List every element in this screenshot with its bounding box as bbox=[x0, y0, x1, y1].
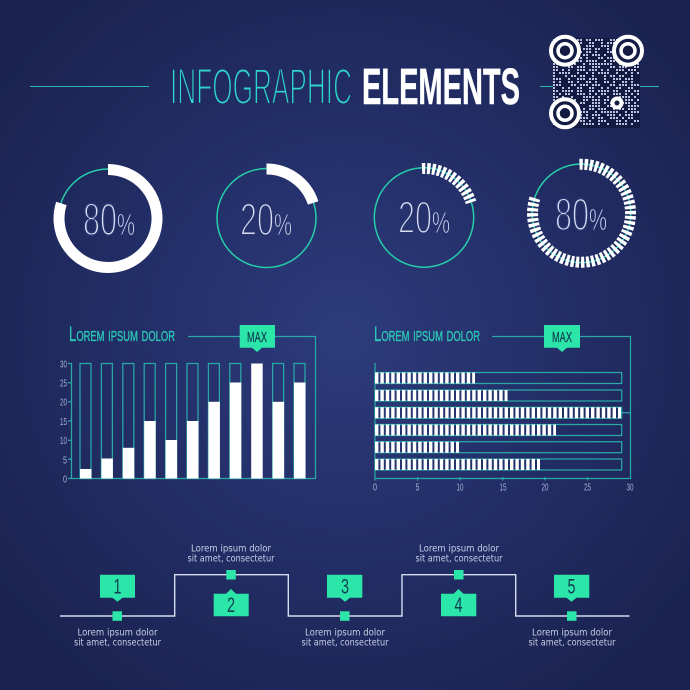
bar outlines bbox=[375, 372, 622, 470]
step 5 bbox=[528, 575, 616, 648]
step 4: Lorem ipsum dolor bbox=[419, 544, 499, 554]
step 2: sit amet, consectetur bbox=[188, 554, 275, 564]
step 3 bbox=[302, 575, 389, 648]
max tag bbox=[240, 325, 275, 352]
title: INFOGRAPHIC bbox=[170, 58, 352, 115]
y axis labels: 0 bbox=[63, 474, 67, 486]
x axis labels bbox=[373, 482, 634, 494]
donut: 80% solid bbox=[58, 169, 158, 268]
panel: column chart bbox=[60, 323, 316, 486]
step 2: Lorem ipsum dolor bbox=[191, 544, 271, 554]
step 3: Lorem ipsum dolor bbox=[305, 628, 385, 638]
x axis labels: 15 bbox=[500, 482, 507, 494]
heading: bar chart: Lorem ipsum dolor bbox=[374, 323, 480, 346]
donut: 80% segmented: 80 bbox=[555, 189, 589, 240]
max tag: MAX bbox=[247, 329, 267, 346]
donut: 20% segmented: 20 bbox=[398, 192, 432, 243]
x axis labels: 10 bbox=[456, 482, 464, 494]
column outlines bbox=[80, 364, 305, 478]
heading: column chart: Lorem ipsum dolor bbox=[69, 323, 175, 346]
donut: 80% solid: % bbox=[117, 207, 135, 242]
donut: 80% segmented bbox=[532, 164, 631, 263]
title bbox=[30, 58, 659, 115]
panel: horizontal bar chart bbox=[373, 323, 634, 494]
step 3: 3 bbox=[341, 576, 349, 598]
x axis labels: 25 bbox=[584, 482, 591, 494]
step 2: 2 bbox=[227, 594, 235, 617]
chart frame bbox=[375, 336, 630, 480]
donut: 20% segmented bbox=[374, 168, 474, 267]
step 4: sit amet, consectetur bbox=[416, 554, 503, 564]
donut: 80% segmented: % bbox=[589, 202, 607, 237]
x axis labels: 0 bbox=[373, 482, 377, 494]
step 1: Lorem ipsum dolor bbox=[78, 628, 158, 638]
step 1: sit amet, consectetur bbox=[74, 638, 161, 648]
y axis labels: 30 bbox=[60, 358, 67, 370]
step 4 bbox=[416, 544, 503, 617]
column values bbox=[80, 364, 306, 478]
step 2 bbox=[188, 544, 275, 617]
step 4: 4 bbox=[454, 594, 463, 617]
step 3: sit amet, consectetur bbox=[302, 638, 389, 648]
y axis labels: 15 bbox=[60, 416, 67, 428]
y axis labels: 10 bbox=[60, 435, 67, 447]
max tag bbox=[544, 325, 580, 352]
donut: 20% solid: 20 bbox=[240, 194, 274, 245]
step 1: 1 bbox=[114, 576, 122, 598]
step 1 bbox=[74, 575, 161, 648]
y axis labels: 5 bbox=[63, 454, 67, 466]
y axis labels bbox=[60, 358, 67, 486]
x axis labels: 30 bbox=[626, 482, 634, 494]
y axis labels: 25 bbox=[60, 378, 67, 390]
step 5: 5 bbox=[568, 576, 576, 598]
step 5: sit amet, consectetur bbox=[528, 638, 616, 648]
x axis labels: 5 bbox=[416, 482, 420, 494]
QR code bbox=[551, 37, 642, 128]
panel: timeline bbox=[60, 544, 630, 648]
x axis labels: 20 bbox=[542, 482, 549, 494]
title: ELEMENTS bbox=[362, 58, 520, 115]
timeline line bbox=[60, 575, 630, 616]
max tag: MAX bbox=[552, 329, 572, 346]
chart frame bbox=[68, 336, 316, 478]
donut: 20% segmented: % bbox=[432, 205, 450, 240]
donut: 20% solid: % bbox=[274, 207, 292, 242]
step 5: Lorem ipsum dolor bbox=[532, 628, 612, 638]
bar values bbox=[375, 378, 621, 464]
donut: 80% solid: 80 bbox=[83, 194, 117, 245]
y axis labels: 20 bbox=[60, 396, 67, 408]
donut: 20% solid bbox=[217, 168, 316, 268]
